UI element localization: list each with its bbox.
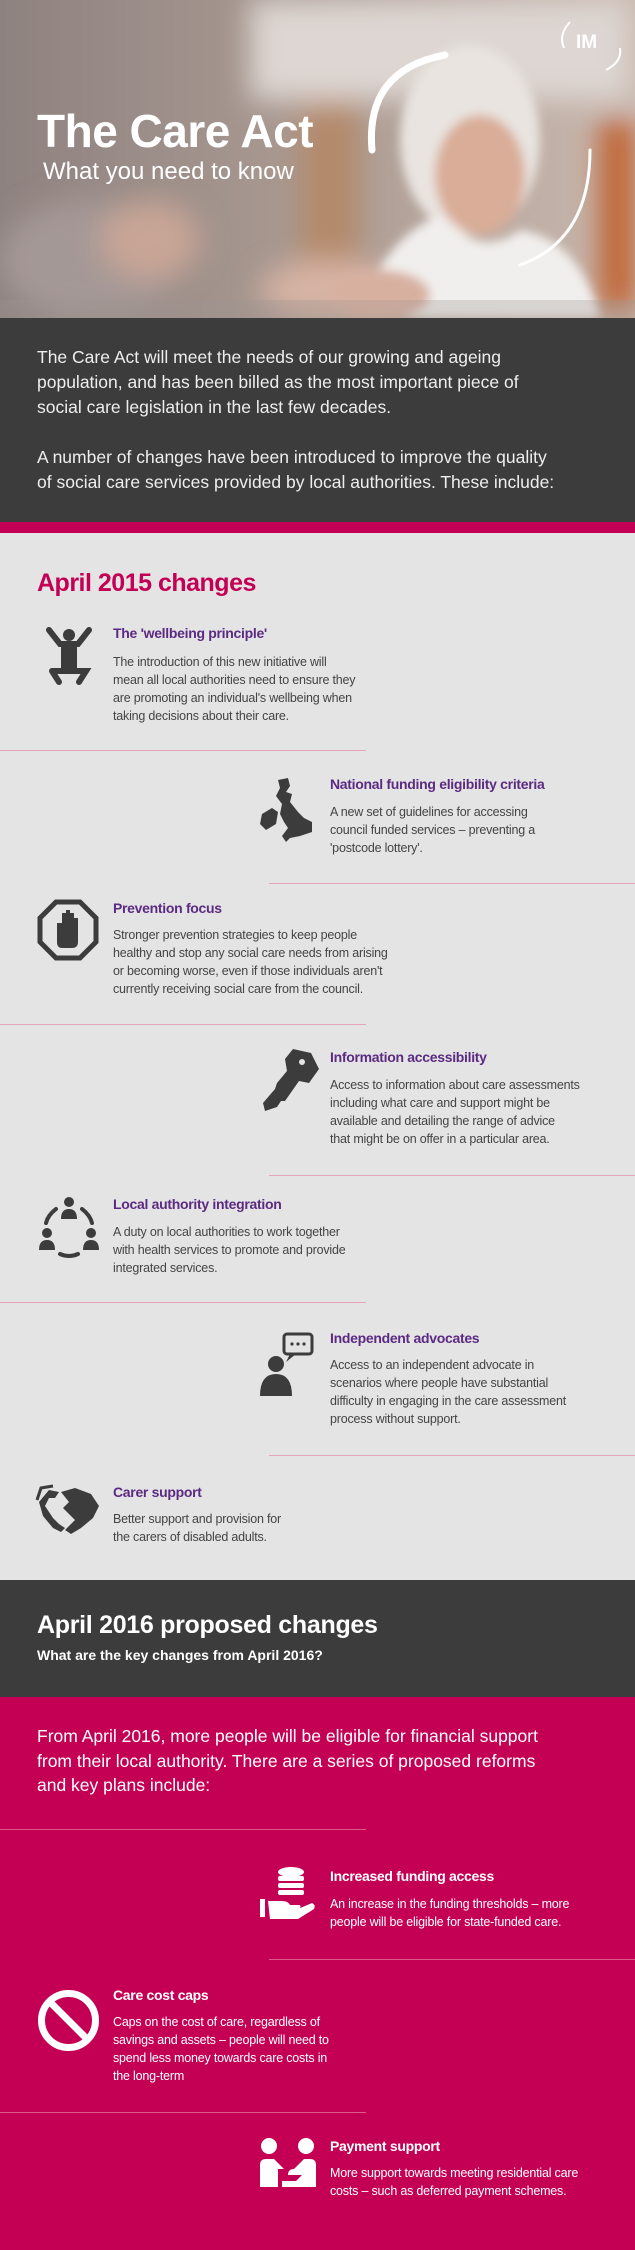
item: local authority integration: Local authority integration [113, 1196, 281, 1212]
icon: people circle [39, 1197, 99, 1258]
heading: April 2016 proposed changes [37, 1611, 378, 1639]
item: payment support [260, 2138, 578, 2198]
intro text: The Care Act will meet the needs of our growing and ageing [37, 347, 501, 367]
item: wellbeing: The 'wellbeing principle' [113, 625, 267, 641]
item: wellbeing: mean all local authorities need to ensure they [113, 673, 355, 687]
item: carer support: Carer support [113, 1484, 202, 1500]
item: care cost caps: Care cost caps [113, 1987, 208, 2003]
item: independent advocates [260, 1330, 566, 1426]
subheading: What are the key changes from April 2016? [37, 1647, 323, 1663]
item: local authority integration [39, 1196, 346, 1275]
subtitle: What you need to know [43, 158, 294, 185]
item: increased funding access: An increase in the funding thresholds – more [330, 1897, 569, 1911]
item: information accessibility: available and detailing the range of advice [330, 1114, 555, 1128]
item: wellbeing [46, 625, 356, 723]
item: payment support: More support towards meeting residential care [330, 2166, 578, 2180]
intro text: population, and has been billed as the most important piece of [37, 372, 519, 392]
item: local authority integration: integrated services. [113, 1261, 217, 1275]
item: local authority integration: A duty on local authorities to work together [113, 1225, 340, 1239]
item: increased funding access: people will be eligible for state-funded care. [330, 1915, 561, 1929]
icon: jumping person [46, 627, 92, 685]
item: independent advocates: scenarios where people have substantial [330, 1376, 548, 1390]
icon: coins in hand [260, 1867, 315, 1919]
icon: UK map [260, 778, 312, 842]
item: national funding: council funded services – preventing a [330, 823, 535, 837]
item: independent advocates: Independent advocates [330, 1330, 479, 1346]
intro text: and key plans include: [37, 1775, 210, 1795]
icon: person with speech bubble [260, 1332, 314, 1396]
item: carer support: Better support and provision for [113, 1512, 281, 1526]
item: wellbeing: are promoting an individual's wellbeing when [113, 691, 352, 705]
intro text: of social care services provided by local authorities. These include: [37, 472, 554, 492]
item: independent advocates: process without support. [330, 1412, 461, 1426]
item: wellbeing: taking decisions about their care. [113, 709, 289, 723]
item: wellbeing: The introduction of this new initiative will [113, 655, 327, 669]
item: national funding: A new set of guidelines for accessing [330, 805, 528, 819]
item: independent advocates: difficulty in engaging in the care assessment [330, 1394, 566, 1408]
item: information accessibility: Access to information about care assessments [330, 1078, 580, 1092]
item: prevention [38, 900, 388, 996]
item: carer support: the carers of disabled adults. [113, 1530, 267, 1544]
item: independent advocates: Access to an independent advocate in [330, 1358, 534, 1372]
hero photo: IM [576, 32, 597, 53]
item: payment support: costs – such as deferred payment schemes. [330, 2184, 566, 2198]
item: prevention: Prevention focus [113, 900, 222, 916]
intro text: from their local authority. There are a series of proposed reforms [37, 1750, 535, 1770]
item: carer support [36, 1484, 281, 1544]
title: The Care Act [37, 105, 313, 157]
item: prevention: currently receiving social care from the council. [113, 982, 363, 996]
panel: April 2016 content [0, 1697, 635, 2250]
item: national funding: National funding eligibility criteria [330, 776, 544, 792]
icon: handshake [36, 1484, 99, 1534]
item: care cost caps: spend less money towards care costs in [113, 2051, 327, 2065]
intro text: A number of changes have been introduced to improve the quality [37, 447, 547, 467]
item: increased funding access: Increased funding access [330, 1868, 494, 1884]
intro text: From April 2016, more people will be eligible for financial support [37, 1726, 538, 1746]
item: care cost caps: Caps on the cost of care, regardless of [113, 2015, 320, 2029]
item: local authority integration: with health services to promote and provide [113, 1243, 346, 1257]
item: national funding [260, 776, 545, 855]
heading: April 2015 changes: April 2015 changes [37, 569, 256, 597]
item: care cost caps: savings and assets – people will need to [113, 2033, 329, 2047]
item: prevention: or becoming worse, even if those individuals aren't [113, 964, 382, 978]
item: information accessibility: including what care and support might be [330, 1096, 550, 1110]
item: prevention: healthy and stop any social care needs from arising [113, 946, 388, 960]
intro text [37, 1726, 538, 1795]
icon: key [263, 1049, 319, 1111]
item: information accessibility [263, 1049, 580, 1146]
item: information accessibility: that might be on offer in a particular area. [330, 1132, 550, 1146]
item: information accessibility: Information accessibility [330, 1049, 487, 1065]
item: care cost caps [38, 1987, 329, 2083]
intro panel [0, 318, 635, 522]
panel: April 2016 heading [0, 1580, 635, 1697]
item: increased funding access [260, 1867, 569, 1929]
logo arcs [371, 55, 445, 150]
icon: two people exchanging [260, 2138, 316, 2187]
item: national funding: 'postcode lottery'. [330, 841, 423, 855]
hero photo [0, 0, 635, 318]
item: prevention: Stronger prevention strategies to keep people [113, 928, 357, 942]
intro text: social care legislation in the last few decades. [37, 397, 391, 417]
intro text [37, 347, 554, 492]
item: care cost caps: the long-term [113, 2069, 184, 2083]
icon: prohibition sign [38, 1990, 99, 2051]
icon: stop hand [38, 900, 98, 960]
item: payment support: Payment support [330, 2138, 440, 2154]
